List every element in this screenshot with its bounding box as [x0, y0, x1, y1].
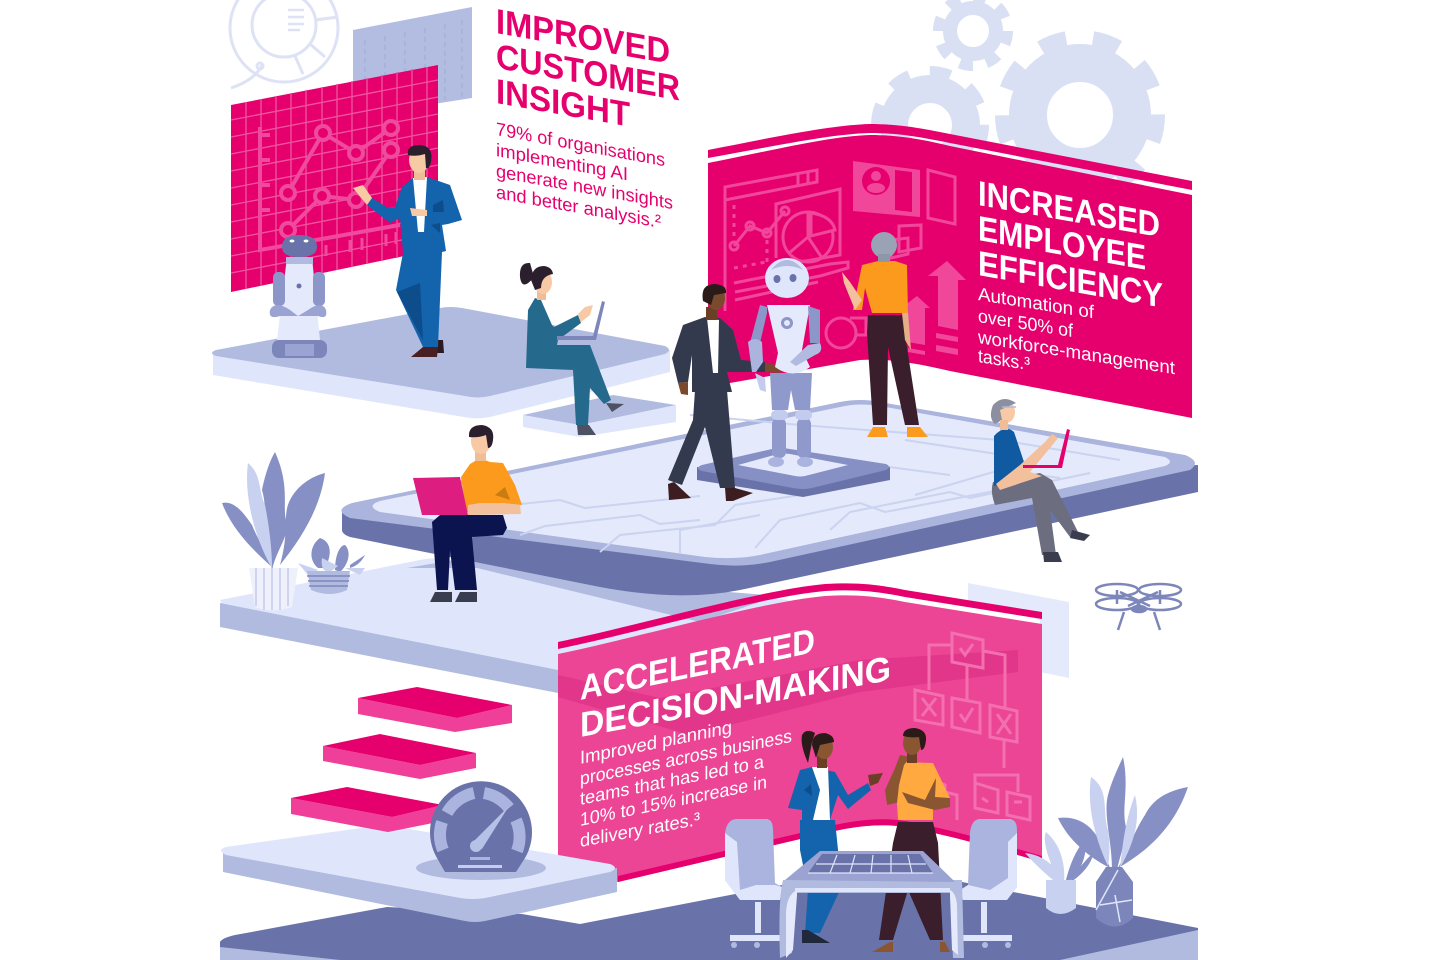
- person: seated woman with pink laptop: [991, 399, 1090, 562]
- pot: [249, 568, 298, 610]
- text: employee efficiency body: over 50% of: [978, 305, 1074, 341]
- text: decision-making body: 10% to 15% increase in: [580, 771, 767, 830]
- icon: drone: [1096, 584, 1181, 630]
- plant: right pot plant: [1025, 832, 1094, 914]
- heading: improved customer insight: IMPROVED: [496, 2, 670, 72]
- platform: circuit floor: [341, 400, 1198, 595]
- person: walking man in dark suit: [668, 284, 782, 501]
- heading: accelerated decision-making: DECISION-MAKING: [580, 649, 891, 745]
- flowchart icon: [915, 633, 1030, 820]
- plant: right vase plant: [1058, 757, 1188, 926]
- person: woman in blue meeting: [788, 731, 883, 943]
- heading: increased employee efficiency: INCREASED: [978, 174, 1160, 245]
- arrows: [904, 261, 966, 355]
- platform: seated step: [523, 395, 676, 437]
- robot: humanoid robot: [748, 258, 821, 467]
- panel: increased employee efficiency: [708, 124, 1192, 418]
- text: employee efficiency body: workforce-management: [977, 326, 1176, 378]
- text: customer insight body: and better analysis.²: [496, 181, 661, 232]
- icon: data wheel background: [230, 0, 338, 88]
- heading: increased employee efficiency: [978, 174, 1163, 316]
- line chart series: [260, 121, 400, 256]
- text: decision-making body: Improved planning: [580, 716, 732, 768]
- panel icons: [725, 170, 955, 348]
- plant: left small basket: [298, 538, 365, 594]
- person: presenter in blue suit: [353, 145, 462, 357]
- person: woman in orange top at board: [842, 232, 928, 437]
- platform: presenter stage: [212, 307, 670, 418]
- circuit traces: [440, 415, 1120, 553]
- platform: lower shelf: [220, 556, 790, 693]
- platform: robot pedestal: [697, 448, 890, 497]
- plant: left large plant: [222, 452, 325, 610]
- heading: accelerated decision-making: ACCELERATED: [580, 622, 815, 708]
- text: customer insight body: implementing AI: [496, 139, 628, 184]
- text: employee efficiency body: Automation of: [978, 283, 1095, 322]
- chart board: pink line chart: [231, 65, 438, 292]
- text: decision-making body: [580, 716, 792, 851]
- text: customer insight body: generate new insights: [496, 160, 673, 213]
- text: decision-making body: delivery rates.³: [580, 808, 700, 851]
- furniture: touchscreen table: [779, 851, 964, 958]
- furniture: left chair: [725, 819, 782, 948]
- text: customer insight body: 79% of organisations: [496, 118, 665, 170]
- heading: improved customer insight: CUSTOMER: [496, 37, 680, 108]
- floor: meeting area: [220, 866, 1198, 960]
- person: man in orange meeting: [872, 728, 950, 952]
- person: seated man with pink laptop: [413, 425, 522, 602]
- profile card: [853, 161, 920, 217]
- panel: backdrop sheet: [968, 583, 1069, 678]
- heading: improved customer insight: INSIGHT: [496, 72, 630, 135]
- panel: accelerated decision-making: [558, 583, 1042, 882]
- text: decision-making body: processes across business: [580, 725, 792, 789]
- person: seated woman with laptop: [520, 263, 624, 435]
- heading: increased employee efficiency: EFFICIENCY: [978, 244, 1163, 316]
- steps: pink stairs: [291, 687, 512, 832]
- text: employee efficiency body: [977, 283, 1176, 378]
- heading: improved customer insight: [496, 2, 680, 135]
- text: customer insight body: [496, 118, 673, 232]
- icon: speedometer gauge: [416, 781, 546, 880]
- text: decision-making body: teams that has led to a: [580, 751, 765, 809]
- text: employee efficiency body: tasks.³: [978, 345, 1030, 374]
- platform: gauge shelf: [221, 825, 617, 922]
- icon: gears: [877, 0, 1157, 192]
- robot: small service robot: [270, 235, 327, 358]
- furniture: right chair: [960, 819, 1017, 948]
- heading: increased employee efficiency: EMPLOYEE: [978, 209, 1146, 278]
- panel: data board background: [353, 7, 472, 120]
